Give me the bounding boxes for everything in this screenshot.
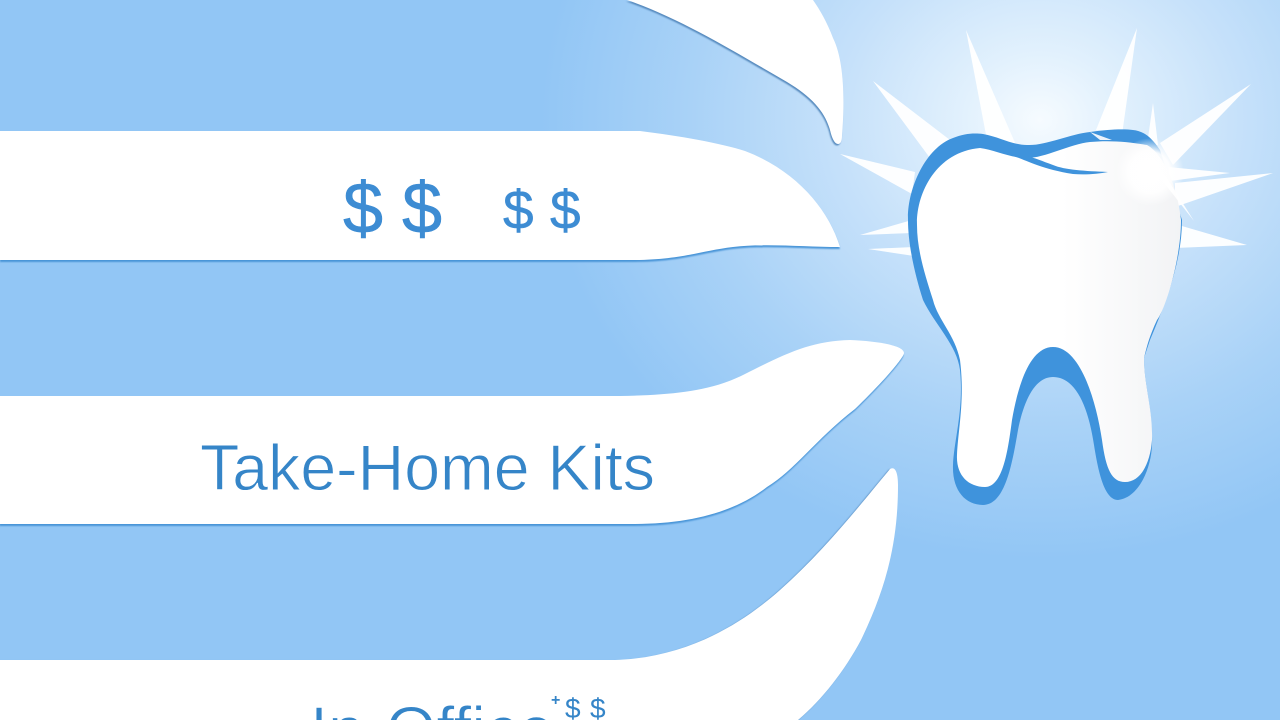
cost label: dollar signs (343, 169, 581, 249)
tooth blue outline shadow (908, 129, 1182, 505)
sparkle rays (840, 28, 1273, 256)
cost label: dollar signs: $ (503, 179, 534, 241)
brush stroke: top (626, 0, 843, 146)
sparkle glint rays (1090, 132, 1194, 221)
glow behind tooth (500, 0, 1280, 600)
label: In-Office with plus and dollars: + (551, 692, 560, 709)
tooth white body (917, 141, 1181, 487)
brush stroke: second with dollar signs (0, 131, 840, 262)
brush stroke: in-office (0, 468, 898, 720)
cost label: dollar signs: $ (402, 169, 442, 249)
tooth highlight stroke (1005, 154, 1108, 174)
label: Take-Home Kits: Take-Home Kits (200, 431, 655, 504)
cost label: dollar signs: $ (343, 169, 383, 249)
cost label: dollar signs: $ (550, 179, 581, 241)
brush stroke: take-home kits (0, 340, 904, 526)
tooth sparkle (1116, 138, 1184, 206)
tooth (908, 129, 1194, 505)
